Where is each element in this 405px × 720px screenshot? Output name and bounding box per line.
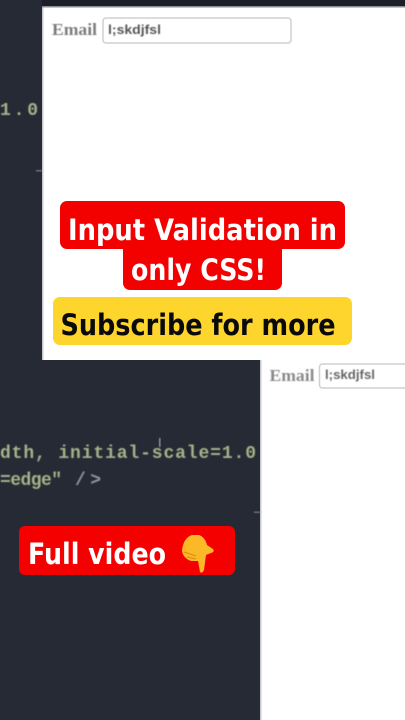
full video callout: Full video <box>28 537 166 571</box>
code fragment: viewport line: dth, initial-scale=1.0 <box>0 444 256 464</box>
text cursor <box>159 438 160 447</box>
lower email input: l;skdjfsl <box>325 368 375 382</box>
upper email input: l;skdjfsl <box>108 23 161 37</box>
scroll tick upper <box>36 170 42 172</box>
code fragment: edge line: =edge" <box>0 471 62 491</box>
upper browser panel <box>42 6 405 360</box>
top dark bar <box>42 0 405 6</box>
full video callout <box>19 526 235 575</box>
lower email input <box>320 364 405 388</box>
subscribe callout: Subscribe for more <box>60 308 336 342</box>
scroll tick lower <box>254 512 260 513</box>
code fragment: edge line: /> <box>75 471 101 491</box>
title callout: only CSS! <box>131 253 266 287</box>
title callout: Input Validation in <box>68 213 337 247</box>
code fragment: edge line <box>0 471 101 491</box>
title callout <box>60 201 345 290</box>
lower browser panel <box>260 360 405 720</box>
subscribe callout <box>53 297 352 345</box>
code fragment: top line: 1.0 <box>0 101 38 121</box>
lower email label: Email <box>270 366 315 385</box>
upper email input <box>103 18 291 43</box>
icon: pointing down hand <box>182 535 214 573</box>
upper email label: Email <box>52 20 97 39</box>
